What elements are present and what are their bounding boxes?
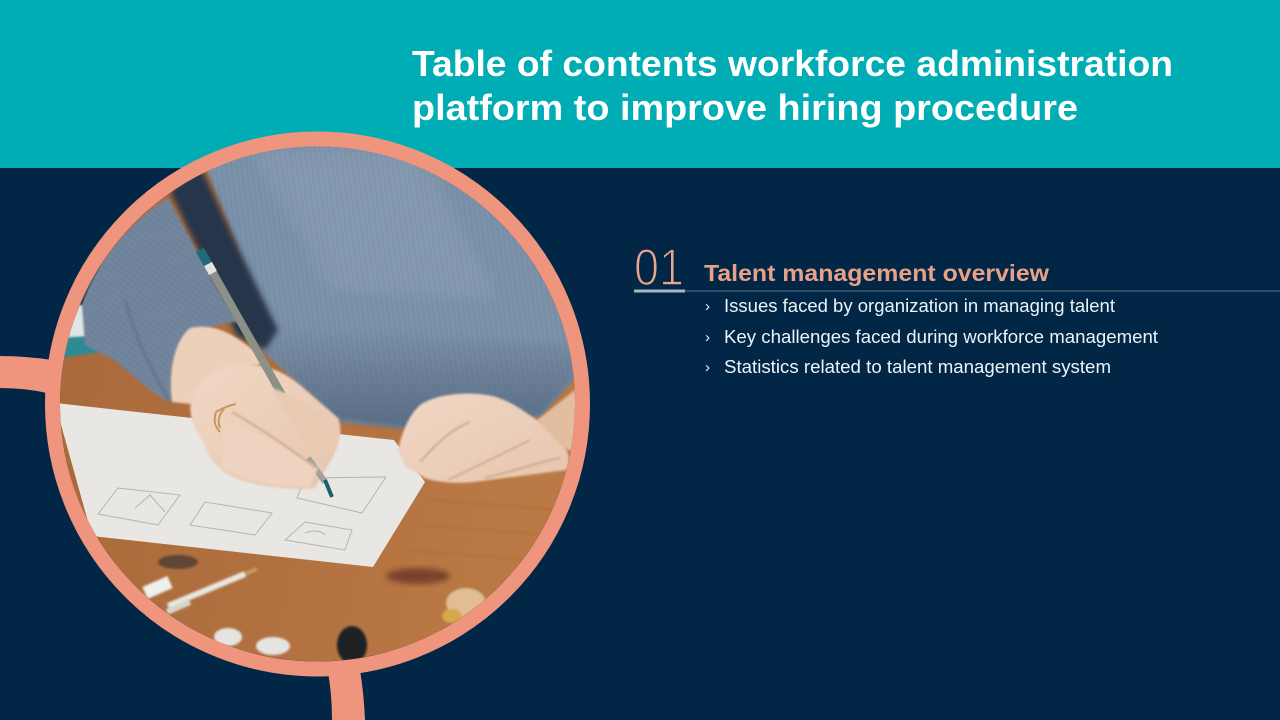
bullet 1: › (705, 298, 710, 315)
ring (215, 404, 236, 432)
title: Table of contents workforce administration (412, 43, 1173, 84)
connector: left arm (0, 356, 52, 393)
section number: 01 (634, 239, 684, 297)
cuff shadow (125, 300, 170, 402)
paper (55, 403, 425, 567)
resting hand (398, 394, 569, 483)
bullet 2: › (705, 329, 710, 346)
fingers (236, 442, 319, 486)
right forearm (537, 389, 575, 452)
table knots (158, 555, 198, 569)
section heading: Talent management overview (704, 260, 1049, 286)
bullet 3: › (705, 359, 710, 376)
left arm (82, 198, 238, 402)
dark gap between arm and body (170, 165, 278, 350)
section rule (634, 290, 1280, 292)
connector: bottom arm (328, 670, 365, 720)
photo ring (52, 139, 582, 669)
photo: person sketching at desk (50, 140, 600, 670)
title (412, 43, 1173, 128)
bullet 1: Issues faced by organization in managing talent (724, 296, 1115, 316)
forearm (171, 327, 268, 404)
header band (0, 0, 1280, 168)
white and teal objects at left (68, 303, 86, 340)
bullet list (705, 296, 1158, 377)
bullet 2: Key challenges faced during workforce management (724, 327, 1158, 347)
sweater lower shadow (268, 346, 574, 432)
bullet 3: Statistics related to talent management system (724, 357, 1111, 377)
backdrop (74, 208, 151, 321)
pencil (200, 250, 332, 497)
sweater highlight (271, 160, 481, 290)
sketches (98, 477, 386, 550)
sweater body (206, 146, 574, 430)
writing hand (190, 364, 340, 489)
markers (145, 569, 486, 664)
title: platform to improve hiring procedure (412, 87, 1078, 128)
table grain on the right (405, 500, 560, 560)
